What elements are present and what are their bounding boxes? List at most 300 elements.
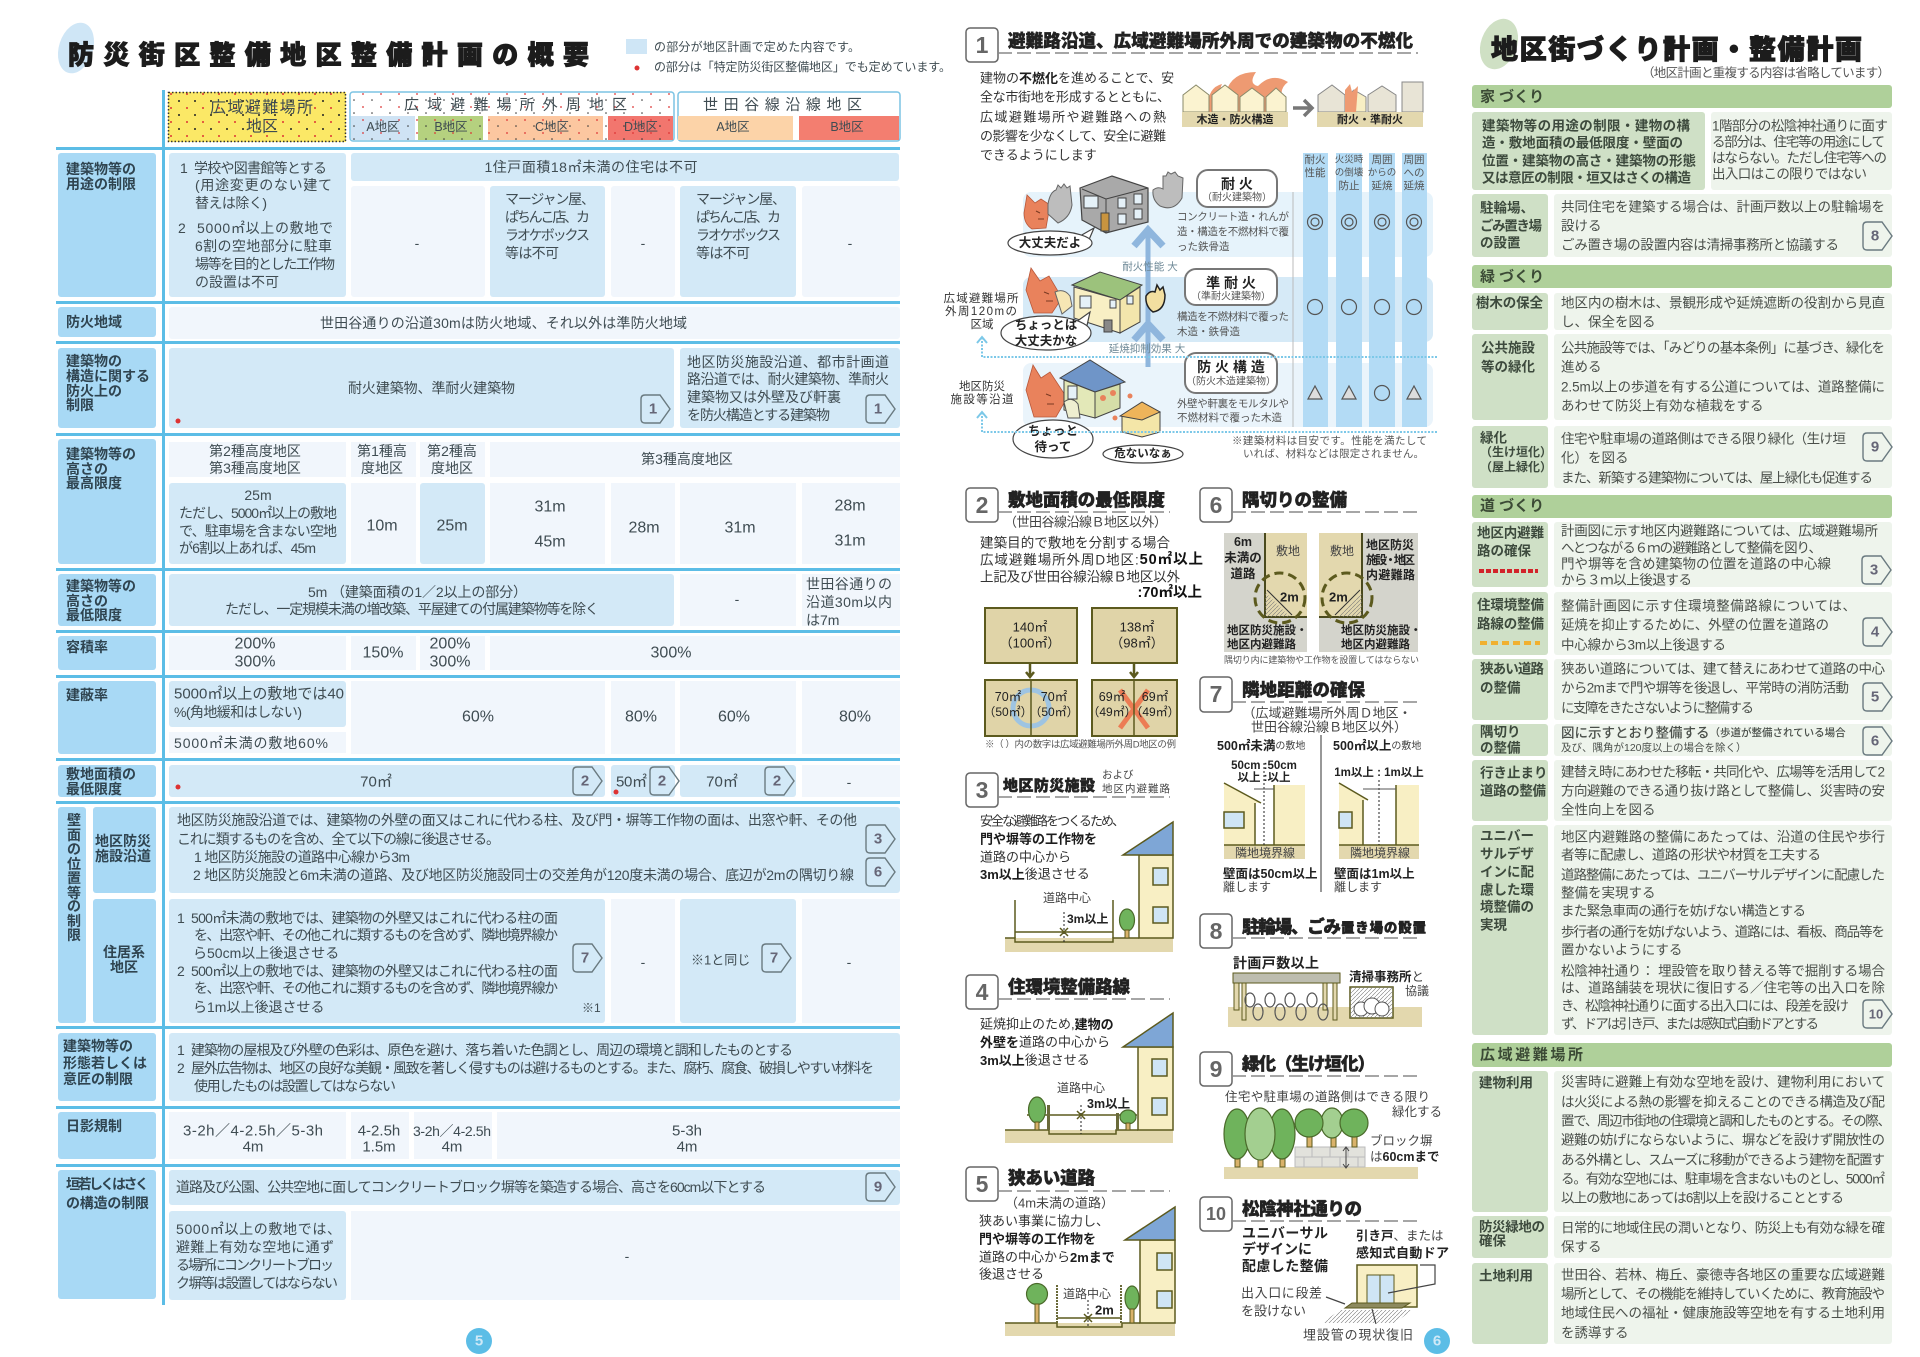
row: building coverage: 5000㎡未満の敷地60% [174,735,328,751]
row: dead end road: 道路の整備 [1480,782,1546,798]
row: public facility greening [1472,334,1892,420]
row: minimum height: 最低限度 [66,607,122,623]
icon: fire resistant houses [1317,82,1423,127]
diagram: under 500 sqm: 50cm :50cm [1231,760,1297,772]
row: universal design: 歩行者の通行を妨げないよう、道路には、看板、商品等を [1561,924,1885,940]
row: building coverage: 5000㎡以上の敷地では40 [174,684,344,702]
diagram: corner cut left: 敷地 [1276,544,1300,558]
subtitle: （地区計画と重複する内容は省略しています） [1642,65,1890,80]
body text: 後退させる [979,1266,1044,1282]
speech bubble: it's fine [1008,228,1094,255]
table grid lines [56,90,900,1305]
badge 1: 1 [649,400,657,418]
row: form and design restrictions: 屋外広告物は、地区の良好な美観・風致を著しく侵すものは避けるものとする。また、腐朽、腐食、破損しやすい材料を [191,1060,874,1076]
diagram: corner cut right: 内避難路 [1366,567,1415,582]
row: structural fire restrictions: を防火構造とする建築物 [687,407,830,423]
diagram: corner cut right: 2m [1329,590,1348,604]
row: universal design: 慮した環 [1480,882,1534,898]
diagram: 500 sqm or more: 壁面は1m以上 [1334,867,1415,881]
badge: section 7: 7 [1210,681,1222,707]
row: maximum height [58,439,900,564]
zone label: disaster prevention facility road [950,379,1014,406]
row: minimum height: 5m （建築面積の1／2以上の部分） [308,584,527,600]
row: maximum height: 第2種高度地区 [209,443,301,459]
footnote: いれば、材料などは限定されません。 [1243,447,1424,460]
row: wall position restrictions: 2 [177,963,185,979]
badge 7: 7 [581,950,589,966]
body text: 門や塀等の工作物を [979,1232,1096,1246]
grade label: semi fireproof [1185,269,1277,305]
section: wide-area evacuation site: 広域避難場所 [1480,1046,1583,1064]
row: wall position restrictions: 地区防災 [95,833,151,849]
row: form and design restrictions: 意匠の制限 [63,1071,133,1087]
row: narrow road: の整備 [1480,680,1521,696]
row: wall position restrictions: 500㎡以上の敷地では、建築物の外壁又はこれに代わる柱の面 [191,963,558,979]
badge 1 [641,395,670,423]
badge 1: 1 [874,400,882,418]
panel: section 7 boundary distance [1200,677,1424,894]
row: building rules: 位置・建築物の高さ・建築物の形態 [1482,152,1696,168]
badge: section 7 [1200,677,1232,712]
title blob [52,18,100,78]
badge 6: 6 [1871,732,1879,750]
badge: section 9 [1200,1052,1232,1086]
row: building rules [1472,112,1892,190]
page number 5 [466,1328,492,1354]
subheading: （世田谷線沿線Ｂ地区以外） [1004,514,1167,530]
diagram: corner cut right [1319,533,1422,652]
footnote: ※（ ）内の数字は広域避難場所外周D地区の例 [985,738,1176,750]
grade label: fireproof [1197,170,1277,207]
text: fireproof description [1177,210,1290,253]
badge: section 1: 1 [976,32,989,58]
header: perimeter district: C地区 [535,120,569,134]
row: form and design restrictions: 建築物の屋根及び外壁の色彩は、原色を避け、落ち着いた色調とし、周辺の環境と調和したものとする [191,1042,793,1058]
row: residential route: 延焼を抑止するために、外壁の位置を道路の [1561,618,1829,632]
row: bicycle and garbage: 共同住宅を建築する場合は、計画戸数以上の駐輪場を [1561,200,1885,214]
row: form and design restrictions: 2 [177,1060,185,1076]
zone label: 120m perimeter: 区域 [970,318,994,331]
row: land use: 地域住民への福祉・健康施設等空地を有する土地利用 [1561,1304,1885,1320]
section: house building [1472,85,1892,257]
diagram: bicycle shelter [1228,955,1422,1027]
row: universal design: 地区内避難路の整備にあたっては、沿道の住民や歩行 [1561,830,1885,844]
badge: section 8 [1200,914,1232,948]
row: maximum height: 高さの [66,461,108,477]
footnote [1232,434,1427,460]
chart: building performance matrix: の倒壊 [1335,166,1364,178]
row: building use: ある外構とし、スムーズに移動ができるよう建物を配置す [1561,1152,1885,1168]
badge 5: 5 [1871,688,1879,706]
row: narrow road [1472,659,1892,720]
row: building use: る。有効な空地には、駐車場を含まないものとし、5000㎡ [1561,1172,1886,1186]
text: universal design [1242,1225,1328,1274]
row: maximum height: 31m [534,498,566,516]
row: maximum height: 25m [244,487,272,503]
diagram: road setback 2m: 道路中心 [1063,1286,1111,1301]
arrow: performance increases upward [1134,230,1163,367]
panel: section 10 Shoin shrine street [1200,1197,1450,1354]
row: public facility greening: 公共施設等では、「みどりの基本条例」に基づき、緑化を [1561,340,1885,356]
text: fire protection description [1177,397,1289,424]
badge 6: 6 [874,864,882,880]
row: residential route: 中心線から3m以上後退する [1561,638,1726,652]
row: universal design: 実現 [1480,918,1508,932]
badge 10 [1863,1000,1892,1028]
row: evacuation route: 路の確保 [1477,542,1531,558]
page number 6: 6 [1433,1332,1441,1350]
intro text [980,70,1174,162]
row: building rules: る部分は、住宅等の用途にして [1712,134,1885,150]
row: hedge and rooftop greening: 緑化 [1480,430,1508,446]
row: building coverage [58,681,900,754]
row: minimum height: ただし、一定規模未満の増改築、平屋建ての付属建築物等を除く [225,601,599,617]
text: universal design: ユニバーサル [1242,1225,1328,1241]
grade label: fireproof: （耐火建築物） [1202,190,1272,204]
row: use restrictions: - [641,235,646,251]
badge 2: 2 [581,772,589,790]
diagram: corner cut right: 施設・地区 [1366,552,1415,567]
row: corner cut: 図に示すとおり整備する（歩道が整備されている場合 [1561,726,1846,740]
heading: 地区内避難路 [1102,782,1170,795]
header: wide-area evacuation site district [168,92,346,142]
row: wall position restrictions: 500㎡未満の敷地では、建築物の外壁又はこれに代わる柱の面 [191,910,558,926]
row: use restrictions: 学校や図書館等とする [194,160,327,176]
panel: plan overview table page [52,18,951,1354]
text: block wall height [1370,1133,1440,1164]
row: maximum height: 31m [834,532,866,550]
row: dead end road: 行き止まり [1480,766,1548,780]
row: minimum site area: 敷地面積の [66,766,136,782]
chart: building performance matrix: 周囲 [1404,154,1424,166]
row: maximum height: 第1種高 [357,443,407,459]
badge 2 [650,767,679,795]
row: form and design restrictions: 1 [177,1042,185,1058]
badge 3 [1862,556,1891,584]
title: 地区街づくり計画・整備計画 [1491,34,1862,65]
body text: 緑化する [1392,1105,1442,1119]
row: wall position restrictions: ら50cm以上後退させる [193,945,339,961]
diagram: under 500 sqm: 隣地境界線 [1235,845,1295,860]
table column headers [168,92,900,142]
subheading: （4m未満の道路） [1005,1196,1114,1210]
badge 3: 3 [1870,562,1878,578]
badge: section 10: 10 [1206,1204,1226,1224]
badge 7 [762,944,791,972]
text: door note [1356,1229,1449,1260]
intro text: 広域避難場所や避難路への熱 [980,110,1166,124]
row: green space: 確保 [1479,1232,1506,1248]
row: use restrictions: 場等を目的とした工作物 [195,256,335,272]
text: entrance note: 出入口に段差 [1241,1286,1322,1300]
body text: 外壁を道路の中心から [980,1034,1110,1050]
text: fireproof description: った鉄骨造 [1177,240,1230,253]
chart: building performance matrix: 防止 [1338,179,1360,192]
header: wide-area evacuation site district: 広域避難場所 [210,98,313,116]
row: minimum site area: - [847,774,852,790]
text: semi fireproof description: 木造・鉄骨造 [1177,325,1240,338]
diagram: site subdivision: （49㎡） [1087,705,1137,719]
diagram: under 500 sqm: 500㎡未満の敷地 [1217,738,1305,753]
row: wall position restrictions: 置 [67,870,81,886]
row: building coverage: 60% [718,708,750,726]
diagram: site subdivision: 69㎡ [1099,690,1126,704]
row: building rules: 建築物等の用途の制限・建物の構 [1482,118,1690,134]
row: evacuation route: 計画図に示す地区内避難路については、広域避難場所 [1561,524,1878,538]
intro text: できるようにします [980,148,1097,162]
row: residential route: 路線の整備 [1477,616,1544,632]
grade label: fireproof: 耐 火 [1221,176,1253,192]
row: tree preservation: し、保全を図る [1561,314,1656,330]
badge 6 [866,858,895,886]
row: evacuation route: 地区内避難 [1477,524,1544,540]
row: maximum height: 第3種高度地区 [641,451,733,467]
badge: section 4: 4 [976,979,989,1005]
zone label: disaster prevention facility road: 地区防災 [959,379,1005,393]
row: tree preservation [1472,293,1892,330]
row: use restrictions: 1 [180,160,188,176]
speech bubble: somewhat fine [1001,312,1091,350]
body text [980,1016,1114,1068]
zone label: 120m perimeter [944,291,1019,331]
row: floor area ratio: 200% [430,636,470,652]
speech bubble: it's fine: 大丈夫だよ [1019,235,1081,250]
row: maximum height: が6割以上あれば、45m [179,540,316,556]
labels on arrow: 耐火性能 大 [1122,260,1178,273]
row: tree preservation: 地区内の樹木は、景観形成や延焼遮断の役割から見直 [1561,296,1885,310]
diagram: 500 sqm or more: 500㎡以上の敷地 [1333,738,1421,753]
row: minimum height: 高さの [66,593,108,609]
text: consult cleaning office: 協議 [1405,983,1429,998]
row: universal design: 整備を実現する [1561,886,1656,900]
page number 6 [1424,1328,1450,1354]
heading: 狭あい道路 [1008,1168,1096,1188]
row: corner cut: 隅切り [1480,724,1520,740]
header: Setagaya line district: A地区 [716,120,750,134]
heading [1242,917,1426,937]
zone label: 120m perimeter: 広域避難場所 [944,291,1019,305]
badge 9 [1863,433,1892,461]
row: universal design: は、道路舗装を現状に復旧する／住宅等の出入口を除 [1561,980,1886,996]
row: bicycle and garbage: 設ける [1561,218,1602,234]
row: dead end road: 建替え時にあわせた移転・共同化や、広場等を活用して2 [1561,764,1885,780]
text: door note: 引き戸、または [1356,1229,1444,1243]
row: minimum site area: 70㎡ [360,774,392,790]
row: fence structure restrictions: 垣若しくはさく [66,1176,149,1192]
row: use restrictions: 建築物等の [66,161,136,177]
row: minimum site area [58,765,900,797]
row: residential route [1472,592,1892,655]
row: wall position restrictions: 施設沿道 [95,848,151,864]
row: use restrictions: 替えは除く) [195,195,267,211]
speech bubble: wait a moment [1013,420,1093,458]
badge 8: 8 [1871,228,1879,244]
diagram: under 500 sqm: 離します [1223,880,1271,894]
diagram: corner cut right: 敷地 [1330,544,1354,558]
chart: building performance matrix: への [1404,167,1424,179]
illustration: fire resistant building [1024,172,1183,233]
row: floor area ratio: 容積率 [66,639,108,655]
header: perimeter district: 広域避難場所外周地区 [404,96,627,114]
diagram: road setback 2m: 2m [1095,1302,1114,1318]
text: semi fireproof description [1177,310,1289,338]
row: wall position restrictions: 限 [67,927,81,943]
legend [626,39,951,74]
heading: 松陰神社通りの [1242,1199,1362,1219]
row: use restrictions: 1住戸面積18㎡未満の住宅は不可 [484,159,698,175]
chart: building performance matrix: 延焼 [1372,180,1393,192]
diagram: site subdivision: 140㎡ [1013,620,1047,634]
row: maximum height: ただし、5000㎡以上の敷地 [179,505,337,521]
speech bubble: somewhat fine: ちょっとは [1015,318,1078,332]
diagram: road setback 3m: 3m以上 [1067,912,1108,926]
section: wide-area evacuation site [1472,1043,1892,1344]
row: wall position restrictions: 位 [67,856,81,872]
row: maximum height: 28m [834,498,866,514]
panel: section 4 residential environment route [966,975,1173,1143]
row: use restrictions: - [848,235,853,251]
diagram: hedge and block wall [1224,1108,1418,1179]
badge 7 [573,944,602,972]
header: perimeter district [350,92,674,141]
header: perimeter district: A地区 [366,120,400,134]
illustration: fire protected wooden house [1026,360,1160,437]
badge: section 5: 5 [976,1171,989,1197]
badge 5 [1863,683,1892,711]
row: use restrictions [58,153,900,297]
row: maximum height: 度地区 [431,460,473,476]
footnote: ※建築材料は目安です。性能を満たして [1232,434,1427,447]
heading: 避難路沿道、広域避難場所外周での建築物の不燃化 [1008,31,1414,51]
row: building use: 避難の妨げにならないように、塀などを設けず開放性の [1561,1132,1885,1148]
text: entrance note: を設けない [1241,1304,1306,1318]
badge: section 6: 6 [1210,492,1222,518]
diagram: 500 sqm or more: 隣地境界線 [1350,845,1410,860]
chart: building performance matrix: 火災時 [1335,154,1364,166]
speech bubble: dangerous: 危ないなぁ [1114,446,1172,460]
row: building use: は火災による熱の影響を抑えることのできる構造及び配 [1561,1094,1886,1110]
body text [980,534,1203,601]
row: maximum height: 最高限度 [66,475,122,491]
panel: section 6 corner cut [1200,488,1422,665]
row: floor area ratio [58,636,900,670]
row: fire zone: 防火地域 [66,314,122,330]
section: road building [1472,495,1892,1035]
badge 3 [866,825,895,853]
badge 9: 9 [1871,438,1879,456]
row: floor area ratio: 300% [430,654,470,670]
diagram: building entrance [1322,1265,1435,1324]
arrow: zone boundary 2 [977,412,1437,432]
section: greenery [1472,265,1892,488]
badge 4 [1863,618,1892,646]
grade label: fire protection structure: 防 火 構 造 [1197,359,1265,375]
row: wall position restrictions: 壁 [67,812,81,828]
row: public facility greening: 公共施設 [1481,340,1535,356]
row: floor area ratio: 200% [235,636,275,652]
row: use restrictions: マージャン屋、 [696,191,786,207]
heading: 駐輪場、ごみ [1242,917,1341,937]
heading: 敷地面積の最低限度 [1008,490,1166,510]
body text [1225,1089,1442,1119]
row: green space [1472,1216,1892,1258]
row: dead end road: 方向避難のできる通り抜け路として整備し、災害時の安 [1561,784,1885,798]
row: green space: 防災緑地の [1479,1218,1545,1234]
diagram: corner cut left [1224,533,1308,652]
row: corner cut: の整備 [1480,740,1521,756]
grade label: fire protection structure [1185,353,1277,393]
grade label: semi fireproof: （準耐火建築物） [1191,290,1271,302]
badge: section 9: 9 [1210,1056,1222,1082]
row: narrow road: から2mまで門や塀等を後退し、平常時の消防活動 [1561,680,1849,696]
intro text: 全な市街地を形成するとともに、 [980,90,1170,104]
diagram: 500 sqm or more [1333,738,1424,894]
body text: 延焼抑止のため,建物の [980,1016,1114,1032]
row: minimum height: は7m [806,612,839,628]
row: universal design: ユニバー [1480,828,1534,844]
grade label: semi fireproof: 準 耐 火 [1206,275,1256,291]
row: minimum site area: 50㎡ [616,774,647,790]
badge 2 [765,767,794,795]
row: land use: 世田谷、若林、梅丘、豪徳寺各地区の重要な広域避難 [1561,1268,1885,1282]
row: shadow regulation: 4m [442,1138,462,1156]
row: universal design: インに配 [1480,864,1534,880]
row: shadow regulation: 3-2h／4-2.5h [413,1123,491,1139]
row: building coverage: 80% [625,708,657,726]
row: public facility greening: あわせて防災上有効な植栽をする [1561,398,1764,414]
row: wall position restrictions: - [847,954,852,970]
row: shadow regulation: 4-2.5h [358,1122,400,1140]
diagram: under 500 sqm: 以上 :以上 [1237,771,1291,784]
row: green space: 日常的に地域住民の潤いとなり、防災上も有効な緑を確 [1561,1220,1885,1236]
row: building rules: 造・敷地面積の最低限度・壁面の [1482,134,1683,150]
heading: 地区防災施設 [1003,776,1095,794]
row: minimum height: 世田谷通りの [806,576,892,592]
body text [979,1214,1115,1282]
text: universal design: 配慮した整備 [1242,1258,1328,1274]
zone label: 120m perimeter: 外周120mの [945,305,1017,318]
row: use restrictions: の設置は不可 [195,274,279,290]
diagram: corner cut left: 地区防災施設・ [1227,623,1308,637]
row: universal design: サルデザ [1480,846,1534,862]
diagram: site subdivision: 70㎡ [995,690,1022,704]
row: use restrictions: ぱちんこ店、カ [505,209,590,225]
row: building coverage: 80% [839,708,871,726]
badge 7: 7 [770,950,778,966]
row: building coverage: %(角地緩和はしない) [174,704,302,720]
diagram: corner cut left: 6m [1234,535,1252,549]
header: Setagaya line district: B地区 [830,120,864,134]
row: fire zone [58,307,900,339]
row: wall position restrictions: を、出窓や軒、その他これに類するものを含めず、隣地境界線か [194,980,558,996]
row: maximum height: 25m [436,518,468,534]
row: corner cut: 及び、隅角が120度以上の場合を除く） [1561,741,1747,754]
row: wall position restrictions: 制 [67,913,81,929]
row: use restrictions: ラオケボックス [505,227,590,243]
row: structural fire restrictions: 地区防災施設沿道、都市計画道 [687,354,889,370]
icon: garbage bin [1350,987,1393,1018]
row: wall position restrictions: を、出窓や軒、その他これに類するものを含めず、隣地境界線か [194,927,558,943]
row: universal design: ず、ドアは引き戸、または感知式自動ドアとする [1561,1016,1819,1032]
section: road building: 道 づくり [1480,498,1544,514]
row: hedge and rooftop greening: （生け垣化） [1480,444,1552,459]
row: form and design restrictions: 形態若しくは [63,1055,147,1071]
speech bubble: somewhat fine: 大丈夫かな [1015,333,1077,348]
row: shadow regulation [58,1112,900,1159]
row: maximum height: 28m [628,520,660,536]
diagram: road setback 2m [1005,1207,1175,1336]
badge 10: 10 [1869,1006,1883,1022]
